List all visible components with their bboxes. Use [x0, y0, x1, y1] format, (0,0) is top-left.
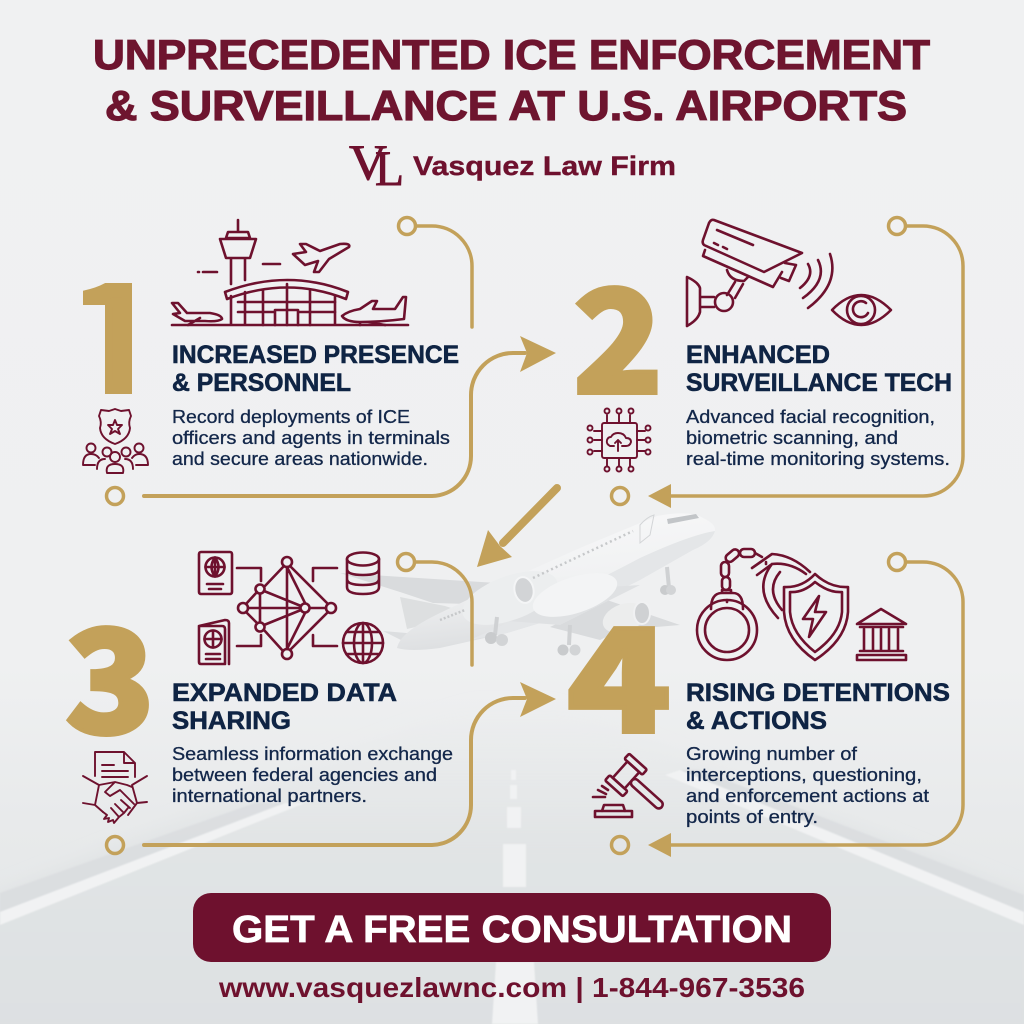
icon: security camera — [687, 220, 891, 326]
number 3: 3 — [65, 568, 155, 775]
heading 3 — [172, 679, 397, 735]
body text 3 — [172, 743, 453, 806]
logo: Vasquez Law Firm — [349, 134, 676, 196]
airplane — [340, 513, 715, 656]
contact line: www.vasquezlawnc.com | 1-844-967-3536 — [218, 972, 805, 1003]
icon: data network — [199, 552, 383, 664]
body text 2: biometric scanning, and — [686, 427, 898, 448]
panel 4: rising detentions — [567, 548, 963, 857]
body text 2: real-time monitoring systems. — [686, 448, 950, 469]
heading 1 — [172, 341, 459, 397]
heading 3: EXPANDED DATA — [172, 679, 397, 707]
number 1: 1 — [68, 228, 160, 435]
icon: AI chip — [588, 408, 650, 472]
arrow: panel 2 to panel 3 — [477, 488, 557, 567]
body text 1 — [172, 406, 450, 469]
heading 1: & PERSONNEL — [172, 369, 351, 397]
connector top 3 — [398, 554, 472, 665]
icon: airport — [172, 220, 408, 325]
body text 1: officers and agents in terminals — [172, 427, 450, 448]
connector 2 with arrow — [612, 218, 963, 508]
logo monogram: L — [375, 140, 404, 196]
title: UNPRECEDENTED ICE ENFORCEMENT — [93, 31, 930, 78]
heading 1: INCREASED PRESENCE — [172, 341, 459, 369]
body text 3: between federal agencies and — [172, 764, 437, 785]
heading 2: SURVEILLANCE TECH — [686, 369, 952, 397]
connector 4 with arrow — [612, 554, 963, 857]
body text 4 — [686, 743, 929, 827]
panel 3: expanded data sharing — [65, 552, 556, 854]
body text 4: interceptions, questioning, — [686, 764, 922, 785]
logo monogram: V — [349, 134, 387, 190]
heading 3: SHARING — [172, 707, 291, 735]
number 4: 4 — [567, 567, 671, 774]
heading 2: ENHANCED — [686, 341, 830, 369]
logo monogram — [349, 134, 404, 196]
body text 2: Advanced facial recognition, — [686, 406, 935, 427]
heading 4 — [686, 679, 950, 735]
body text 3: Seamless information exchange — [172, 743, 453, 764]
body text 3: international partners. — [172, 785, 367, 806]
body text 1: and secure areas nationwide. — [172, 448, 428, 469]
panel 1: increased presence — [68, 218, 556, 504]
call to action button: GET A FREE CONSULTATION — [232, 909, 792, 951]
heading 4: & ACTIONS — [686, 707, 827, 735]
body text 1: Record deployments of ICE — [172, 406, 410, 427]
connector bottom 3 with arrow — [106, 682, 556, 854]
body text 4: and enforcement actions at — [686, 785, 929, 806]
number 2: 2 — [573, 228, 663, 435]
heading 4: RISING DETENTIONS — [686, 679, 950, 707]
body text 4: Growing number of — [686, 743, 858, 764]
connector bottom 1 with arrow — [106, 336, 556, 504]
icon: gavel — [593, 754, 674, 820]
firm name: Vasquez Law Firm — [413, 151, 676, 181]
runway — [0, 700, 1024, 1024]
icon: badge and team — [83, 409, 148, 473]
call to action button — [193, 893, 831, 962]
body text 2 — [686, 406, 950, 469]
connector top 1 — [398, 218, 472, 327]
title: & SURVEILLANCE AT U.S. AIRPORTS — [105, 82, 907, 129]
body text 4: points of entry. — [686, 806, 818, 827]
icon: handcuffs, shield, courthouse — [697, 548, 906, 660]
title — [93, 31, 930, 129]
heading 2 — [686, 341, 952, 397]
panel 2: enhanced surveillance — [573, 218, 963, 508]
icon: handshake and document — [83, 752, 147, 823]
